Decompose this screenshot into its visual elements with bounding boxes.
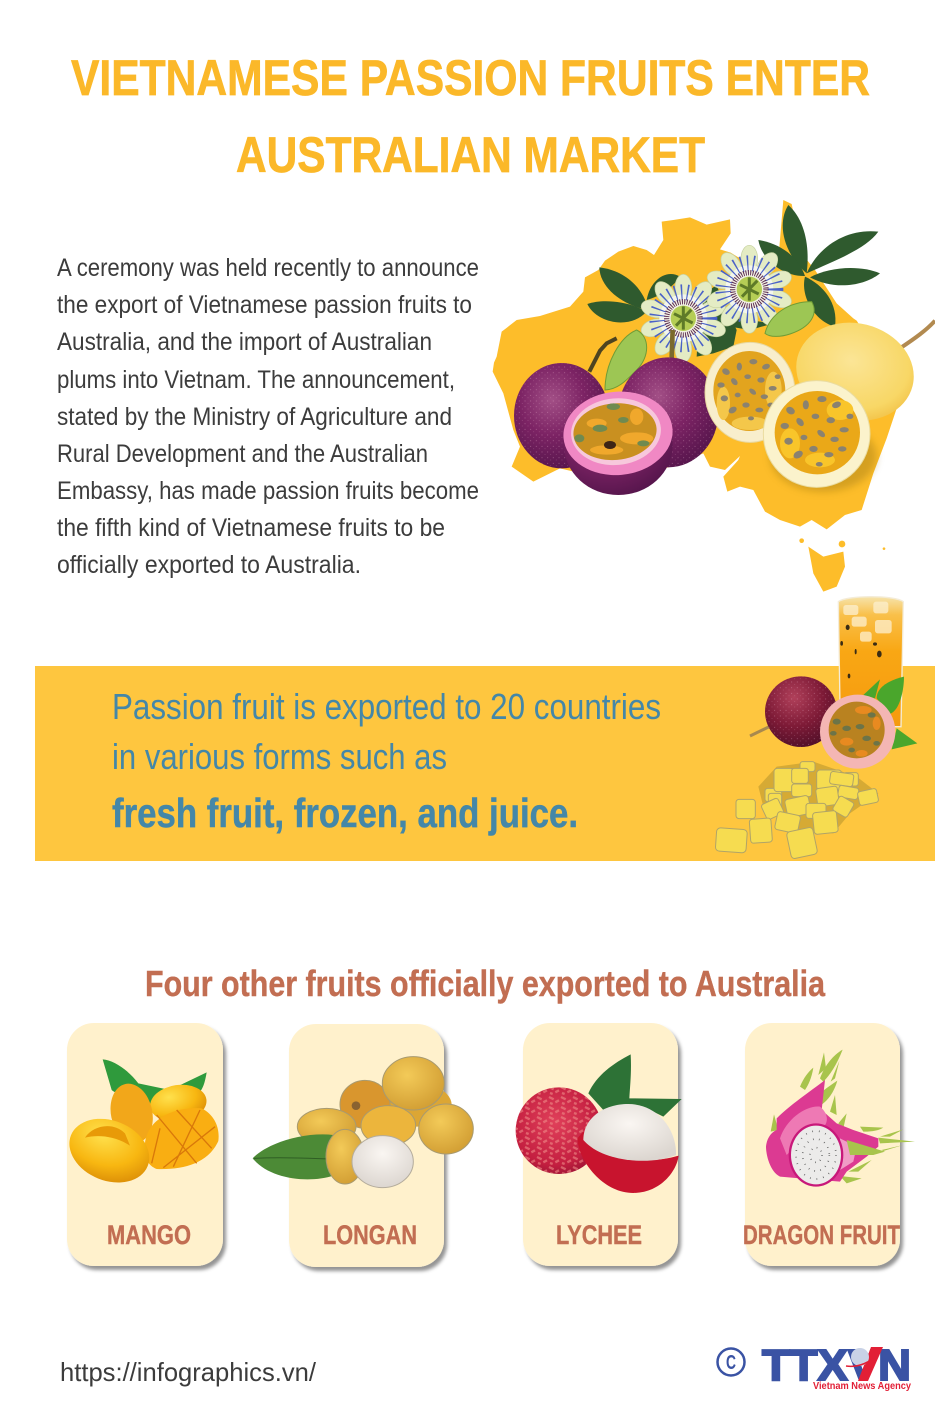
source url: https://infographics.vn/: [60, 1357, 317, 1387]
frozen passion fruit cubes: [715, 762, 879, 859]
lychee label: LYCHEE: [556, 1220, 642, 1250]
mango illustration: [60, 1059, 219, 1194]
section heading: Four other fruits officially exported to Australia: [145, 963, 826, 1004]
card: mango: [60, 1023, 223, 1266]
intro text block: Embassy, has made passion fruits become: [57, 477, 479, 505]
copyright icon: [718, 1348, 744, 1376]
card: longan: [253, 1024, 473, 1267]
shadow under front fruit: [770, 422, 877, 492]
map of Australia: [493, 200, 898, 592]
TTXVN logo: TTXVN: [762, 1341, 911, 1390]
yellow passion fruit whole: [786, 310, 935, 433]
intro text block: Australia, and the import of Australian: [57, 328, 432, 356]
intro text block: Rural Development and the Australian: [57, 440, 428, 468]
banner text: Passion fruit is exported to 20 countries: [112, 686, 661, 727]
banner text: in various forms such as: [112, 736, 447, 777]
purple passion fruit left: [514, 338, 617, 468]
lychee illustration: [516, 1054, 682, 1193]
dragon fruit illustration: [766, 1050, 915, 1187]
Australia map with passion fruits: [493, 200, 935, 592]
title: AUSTRALIAN MARKET: [236, 126, 705, 183]
flower left: [639, 274, 728, 362]
cut purple passion fruit: [560, 387, 676, 495]
whole passion fruit: [750, 676, 837, 747]
longan label: LONGAN: [323, 1220, 417, 1250]
yellow banner: [35, 666, 935, 861]
intro text block: the fifth kind of Vietnamese fruits to be: [57, 514, 445, 542]
TTXVN logo: Vietnam News Agency: [813, 1380, 911, 1392]
cut yellow passion fruit back: [705, 342, 795, 442]
card: dragon fruit: [743, 1023, 915, 1266]
intro text block: [57, 254, 479, 579]
green leaves: [863, 677, 917, 749]
banner illustration: juice, fruit, frozen cubes: [715, 597, 917, 859]
mango label: MANGO: [107, 1220, 191, 1250]
intro text block: plums into Vietnam. The announcement,: [57, 366, 455, 394]
cut passion fruit: [820, 695, 895, 769]
intro text block: A ceremony was held recently to announce: [57, 254, 479, 282]
flower right: [705, 245, 794, 333]
cut yellow passion fruit front: [763, 381, 870, 487]
banner text: fresh fruit, frozen, and juice.: [112, 790, 578, 836]
leaves: [587, 205, 880, 357]
glass of juice: [838, 597, 903, 727]
card: lychee: [516, 1023, 682, 1266]
intro text block: officially exported to Australia.: [57, 551, 361, 579]
intro text block: the export of Vietnamese passion fruits to: [57, 291, 472, 319]
longan illustration: [253, 1057, 473, 1188]
copyright icon: C: [726, 1352, 736, 1374]
intro text block: stated by the Ministry of Agriculture and: [57, 403, 452, 431]
flower buds: [605, 302, 814, 390]
banner text: [112, 686, 661, 836]
title: [71, 49, 870, 183]
purple passion fruit right: [618, 330, 718, 467]
